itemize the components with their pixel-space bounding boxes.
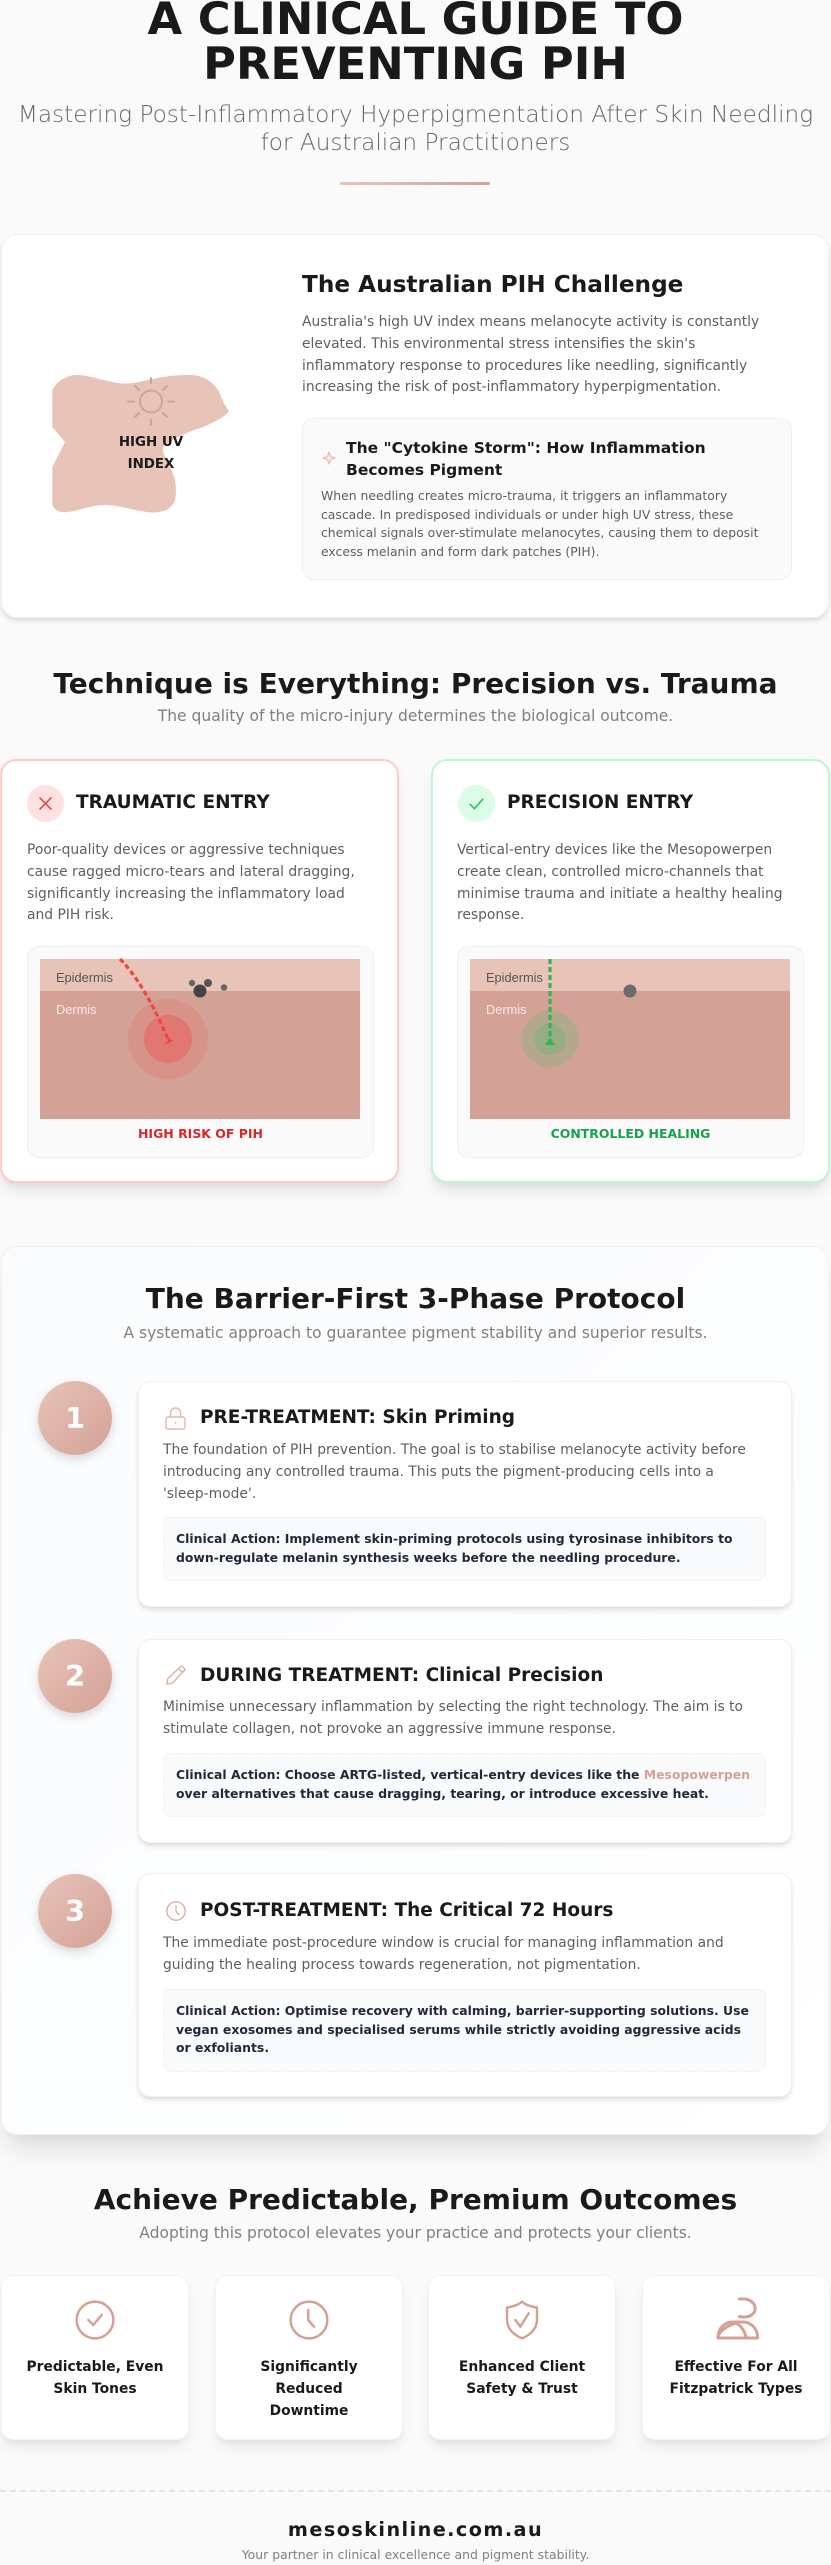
icon: clock bbox=[166, 1901, 186, 1921]
panel: traumatic entry bbox=[0, 759, 399, 1183]
label bbox=[26, 2359, 164, 2397]
header accent bar bbox=[340, 182, 490, 185]
icon: sparkle bbox=[322, 451, 336, 465]
step 1 text bbox=[162, 1442, 746, 1502]
card text: cause ragged micro-tears and lateral dragging, bbox=[27, 864, 355, 880]
text: UV explanation bbox=[302, 314, 759, 395]
step 2 text: stimulate collagen, not provoke an aggressive immune response. bbox=[163, 1721, 616, 1737]
text: UV explanation: increasing the risk of post-inflammatory hyperpigmentation. bbox=[302, 379, 721, 395]
heading: technique: Technique is Everything: Precision vs. Trauma bbox=[53, 667, 778, 700]
icon: cross bbox=[27, 785, 64, 822]
card text: minimise trauma and initiate a healthy healing bbox=[457, 886, 783, 902]
icon: check bbox=[458, 785, 495, 822]
outcome card: even skin tones bbox=[1, 2275, 189, 2440]
callout text: When needling creates micro-trauma, it triggers an inflammatory bbox=[321, 488, 727, 503]
panel: 3-phase protocol bbox=[1, 1246, 829, 2135]
step number 2 bbox=[38, 1639, 112, 1713]
card title: PRECISION ENTRY bbox=[507, 792, 693, 813]
skin diagram: traumatic: Epidermis bbox=[56, 970, 113, 985]
step 1 clinical action box bbox=[163, 1517, 766, 1581]
step card 1 bbox=[138, 1381, 792, 1607]
step 2 clinical action box bbox=[163, 1753, 766, 1817]
step 1 clinical action text: down-regulate melanin synthesis weeks before the needling procedure. bbox=[176, 1550, 681, 1565]
heading: Australian PIH challenge: The Australian PIH Challenge bbox=[302, 271, 683, 298]
panel: precision entry bbox=[431, 759, 830, 1183]
footer tagline: Your partner in clinical excellence and pigment stability. bbox=[242, 2547, 589, 2562]
step 3 clinical action box bbox=[163, 1989, 766, 2072]
header bbox=[18, 0, 813, 185]
icon: pencil bbox=[166, 1665, 186, 1685]
outcome card: reduced downtime bbox=[215, 2275, 403, 2440]
diagram caption: HIGH RISK OF PIH bbox=[138, 1126, 263, 1141]
step number 1 bbox=[38, 1381, 112, 1455]
illustration: high UV index map bbox=[52, 375, 229, 512]
callout text: chemical signals over-stimulate melanocytes, causing them to deposit bbox=[321, 525, 758, 540]
step card 2 bbox=[138, 1639, 792, 1843]
skin diagram: precision bbox=[470, 959, 790, 1119]
card text: Poor-quality devices or aggressive techniques bbox=[27, 842, 345, 858]
skin diagram: precision: Dermis bbox=[486, 1002, 527, 1017]
step 3 clinical action text: vegan exosomes and specialised serums while strictly avoiding aggressive acids bbox=[176, 2022, 741, 2037]
step 1 clinical action text: Clinical Action: Implement skin-priming protocols using tyrosinase inhibitors to bbox=[176, 1531, 733, 1546]
icon: shield check bbox=[506, 2300, 538, 2340]
diagram caption: CONTROLLED HEALING bbox=[551, 1126, 710, 1141]
text: UV explanation: inflammatory response to procedures like needling, significantly bbox=[302, 358, 747, 374]
icon: user bbox=[716, 2297, 760, 2340]
step 3 clinical action text bbox=[176, 2003, 749, 2055]
Australia shape and sun icon bbox=[52, 375, 229, 512]
heading: protocol: The Barrier-First 3-Phase Protocol bbox=[146, 1282, 685, 1315]
label: Enhanced Client bbox=[459, 2359, 585, 2375]
step 2 clinical action text bbox=[176, 1767, 750, 1801]
subheading: outcomes: Adopting this protocol elevates your practice and protects your clients. bbox=[139, 2224, 692, 2242]
step 3 clinical action text: or exfoliants. bbox=[176, 2040, 269, 2055]
icon: clock bbox=[289, 2300, 329, 2340]
step number 3 bbox=[38, 1874, 112, 1948]
label: high UV index: HIGH UV bbox=[119, 435, 183, 450]
callout heading: Becomes Pigment bbox=[346, 461, 502, 479]
step 2 clinical action text: over alternatives that cause dragging, tearing, or introduce excessive heat. bbox=[176, 1786, 709, 1801]
card text: response. bbox=[457, 907, 524, 923]
diagram box bbox=[457, 946, 804, 1158]
callout: cytokine storm bbox=[302, 418, 792, 580]
step 1 title: PRE-TREATMENT: Skin Priming bbox=[200, 1407, 515, 1428]
label: Significantly bbox=[260, 2359, 358, 2375]
card text: and PIH risk. bbox=[27, 907, 114, 923]
step 2 title: DURING TREATMENT: Clinical Precision bbox=[200, 1665, 603, 1686]
title: PREVENTING PIH bbox=[203, 37, 628, 90]
skin diagram: traumatic bbox=[40, 958, 360, 1119]
label: high UV index bbox=[119, 435, 183, 472]
label: Safety & Trust bbox=[466, 2381, 578, 2397]
footer bbox=[0, 2490, 831, 2560]
skin diagram: precision: Epidermis bbox=[486, 970, 543, 985]
step number 2: 2 bbox=[65, 1659, 85, 1693]
card title: TRAUMATIC ENTRY bbox=[76, 792, 270, 813]
subtitle: for Australian Practitioners bbox=[261, 129, 570, 156]
step 2 clinical action text: Clinical Action: Choose ARTG-listed, vertical-entry devices like the Mesopowerpen bbox=[176, 1767, 750, 1782]
step 3 clinical action text: Clinical Action: Optimise recovery with calming, barrier-supporting solutions. Use bbox=[176, 2003, 749, 2018]
step 3 title: POST-TREATMENT: The Critical 72 Hours bbox=[200, 1900, 613, 1921]
label: Skin Tones bbox=[53, 2381, 137, 2397]
card text bbox=[27, 842, 355, 923]
subtitle: Mastering Post-Inflammatory Hyperpigmentation After Skin Needling bbox=[18, 101, 813, 128]
step 1 text: The foundation of PIH prevention. The goal is to stabilise melanocyte activity before bbox=[163, 1442, 746, 1458]
diagram box bbox=[27, 946, 374, 1158]
step 3 text: The immediate post-procedure window is crucial for managing inflammation and bbox=[163, 1935, 724, 1951]
card text: create clean, controlled micro-channels that bbox=[457, 864, 763, 880]
step 1 text: 'sleep-mode'. bbox=[163, 1486, 256, 1502]
step 2 text bbox=[163, 1699, 743, 1737]
label: Reduced bbox=[275, 2381, 343, 2397]
label bbox=[260, 2359, 358, 2419]
card text: significantly increasing the inflammatory load bbox=[27, 886, 345, 902]
step number 1: 1 bbox=[65, 1401, 85, 1435]
label bbox=[459, 2359, 585, 2397]
callout text: cascade. In predisposed individuals or under high UV stress, these bbox=[321, 507, 733, 522]
skin diagram: traumatic: Dermis bbox=[56, 1002, 97, 1017]
panel: Australian PIH challenge bbox=[1, 234, 829, 618]
subtitle bbox=[18, 101, 813, 156]
title bbox=[147, 0, 684, 90]
label: Fitzpatrick Types bbox=[670, 2381, 802, 2397]
icon: lock bbox=[165, 1407, 186, 1430]
label: Downtime bbox=[270, 2403, 348, 2419]
label: high UV index: INDEX bbox=[128, 457, 174, 472]
callout text bbox=[321, 488, 758, 559]
callout heading bbox=[346, 439, 706, 479]
card text: Vertical-entry devices like the Mesopowerpen bbox=[457, 842, 772, 858]
footer website: mesoskinline.com.au bbox=[288, 2518, 543, 2541]
step number 3: 3 bbox=[65, 1894, 85, 1928]
step 1 clinical action text bbox=[176, 1531, 733, 1565]
outcome card: all Fitzpatrick types bbox=[642, 2275, 830, 2440]
icon: check circle bbox=[75, 2300, 115, 2340]
step 2 text: Minimise unnecessary inflammation by selecting the right technology. The aim is to bbox=[163, 1699, 743, 1715]
step 3 text: guiding the healing process towards regeneration, not pigmentation. bbox=[163, 1957, 641, 1973]
label: Predictable, Even bbox=[26, 2359, 164, 2375]
label bbox=[670, 2359, 802, 2397]
label: Effective For All bbox=[674, 2359, 798, 2375]
step 3 text bbox=[162, 1935, 724, 1973]
subheading: protocol: A systematic approach to guarantee pigment stability and superior results. bbox=[123, 1324, 708, 1342]
text: UV explanation: Australia's high UV index means melanocyte activity is constantly bbox=[302, 314, 759, 330]
callout heading: The "Cytokine Storm": How Inflammation bbox=[346, 439, 706, 457]
heading: outcomes: Achieve Predictable, Premium Outcomes bbox=[94, 2183, 737, 2216]
card text bbox=[457, 842, 783, 923]
callout text: excess melanin and form dark patches (PIH). bbox=[321, 544, 599, 559]
step card 3 bbox=[138, 1873, 792, 2097]
outcome card: safety and trust bbox=[428, 2275, 616, 2440]
text: UV explanation: elevated. This environmental stress intensifies the skin's bbox=[302, 336, 695, 352]
subheading: technique: The quality of the micro-injury determines the biological outcome. bbox=[158, 707, 673, 725]
step 1 text: introducing any controlled trauma. This puts the pigment-producing cells into a bbox=[163, 1464, 714, 1480]
